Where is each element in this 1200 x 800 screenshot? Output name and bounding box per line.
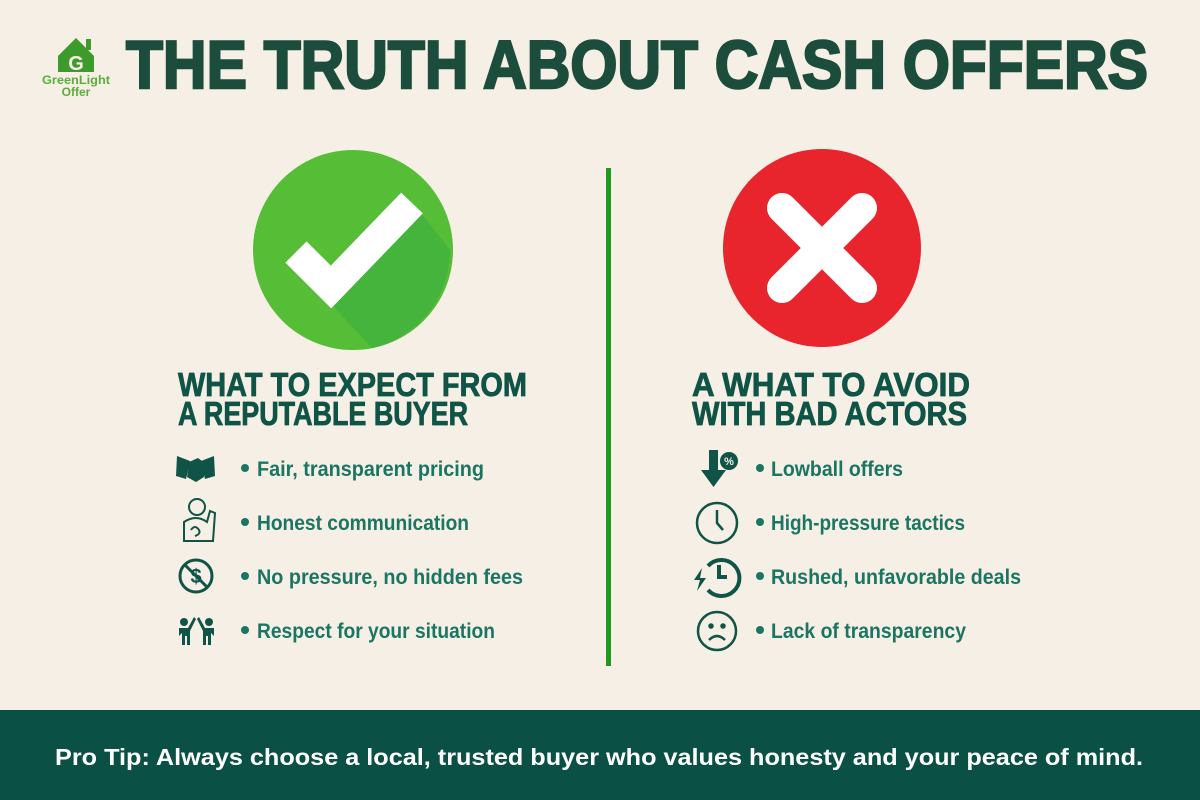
list: reputable buyer: Respect for your situation [257,620,495,643]
heading: bad actors: A WHAT TO AVOID [692,366,970,403]
footer bar: pro tip [0,710,1200,800]
list: reputable buyer: Honest communication [257,512,469,535]
heading: reputable buyer: A REPUTABLE BUYER [178,395,468,432]
icon: person heart [184,499,215,541]
icon: sad face [698,612,736,650]
list: bad actors: Lowball offers [771,458,903,481]
logo [42,38,110,99]
divider [606,168,611,666]
heading: bad actors [692,366,970,432]
list: bad actors: High-pressure tactics [771,512,965,535]
icon: green check circle [253,150,453,350]
list: bad actors: Lack of transparency [771,620,966,643]
list: bad actors [694,450,1021,650]
footer bar: pro tip: Pro Tip: Always choose a local, trusted buyer who values honesty and your peace of mind. [55,744,1143,770]
logo: G [68,53,84,75]
icon: down arrow percent: % [724,456,734,468]
icon: clock [697,503,737,543]
icon: down arrow percent [701,450,738,487]
icon: red x circle [723,149,921,347]
list: bad actors: Rushed, unfavorable deals [771,566,1021,589]
icon: no dollar [180,560,212,592]
heading: reputable buyer [178,366,527,432]
heading: reputable buyer: WHAT TO EXPECT FROM [178,366,527,403]
heading: bad actors: WITH BAD ACTORS [692,395,967,432]
icon: rushed clock [694,560,739,596]
list: reputable buyer: No pressure, no hidden fees [257,566,523,589]
list: reputable buyer: Fair, transparent pricing [257,458,484,481]
list: reputable buyer [176,456,523,645]
icon: handshake [176,456,215,482]
logo: GreenLight [42,73,110,87]
icon: no dollar: $ [190,566,202,588]
icon: high five [179,617,214,645]
logo: Offer [62,85,91,99]
